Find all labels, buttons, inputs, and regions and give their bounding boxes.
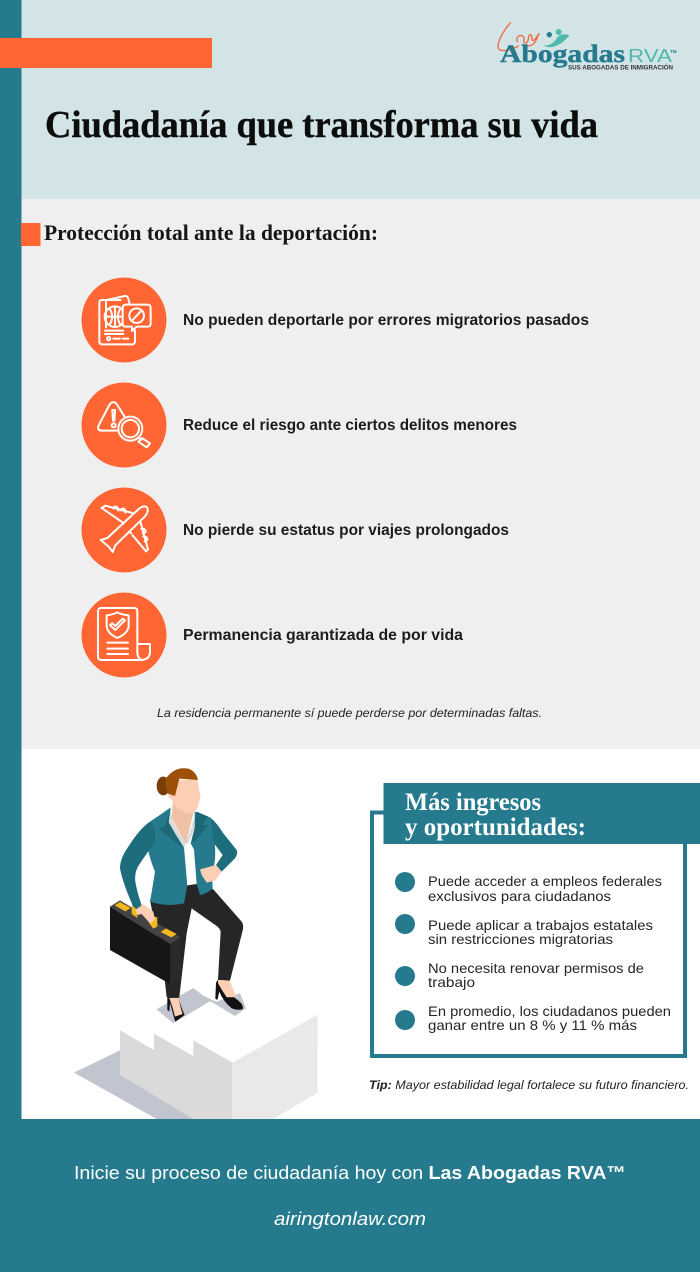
jacket lapels [158, 808, 208, 848]
left vertical bar [0, 0, 22, 1119]
list item 2: Puede aplicar a trabajos estatales [428, 917, 653, 933]
collar [169, 810, 195, 847]
briefcase [110, 900, 181, 984]
list item 1: exclusivos para ciudadanos [428, 888, 611, 904]
block left face [120, 1030, 232, 1119]
list item 2 [395, 914, 653, 947]
logo: RVA: RVA [628, 46, 672, 66]
left hand [135, 904, 155, 923]
title: Ciudadanía que transforma su vida [45, 104, 598, 146]
item: past migration errors [82, 278, 589, 362]
jacket [147, 807, 215, 905]
foot shadow [157, 988, 246, 1023]
logo [498, 23, 677, 72]
item: permanence [82, 592, 463, 678]
tip: Tip: Mayor estabilidad legal fortalece su futuro financiero. [369, 1078, 689, 1092]
list item 4: En promedio, los ciudadanos pueden [428, 1003, 671, 1019]
panel header band [384, 783, 700, 844]
list item 3 [395, 960, 644, 990]
neck [172, 793, 193, 844]
list item 3: No necesita renovar permisos de [428, 960, 644, 976]
panel heading [405, 789, 586, 841]
shoes [167, 980, 243, 1022]
footer website: airingtonlaw.com [274, 1208, 426, 1229]
right hand [200, 865, 222, 883]
shirt [171, 810, 196, 885]
item: minor offences [82, 382, 517, 468]
list item 3: trabajo [428, 974, 475, 990]
panel heading: y oportunidades: [405, 814, 586, 841]
item text: Permanencia garantizada de por vida [183, 627, 463, 644]
figure [110, 768, 243, 1022]
logo: script Las [498, 23, 569, 51]
footer call to action: Inicie su proceso de ciudadanía hoy con Las Abogadas RVA™ [74, 1162, 626, 1183]
panel frame [372, 812, 685, 1056]
logo: tagline: SUS ABOGADAS DE INMIGRACIÓN [568, 64, 673, 72]
icon: airplane [82, 488, 166, 572]
hair bun [157, 777, 170, 795]
list item 4: ganar entre un 8 % y 11 % más [428, 1017, 637, 1033]
right arm [210, 817, 237, 872]
icon: passport and prohibited sign [82, 278, 166, 362]
footer band [0, 1119, 700, 1272]
ankle skin [169, 980, 237, 1017]
block right face [232, 1015, 318, 1119]
panel heading: Más ingresos [405, 789, 541, 816]
orange accent bar [0, 38, 212, 68]
logo: trademark: TM [670, 49, 677, 54]
item text: No pueden deportarle por errores migratorios pasados [183, 312, 589, 329]
item: prolonged travel [82, 488, 509, 572]
panel: deportation protection [21, 199, 700, 749]
list item 4 [395, 1003, 671, 1033]
section marker [21, 223, 40, 246]
left arm [120, 822, 155, 912]
hair [166, 768, 198, 796]
header panel [21, 0, 700, 199]
icon: document with shield [82, 592, 166, 678]
icon: warning and magnifier [82, 382, 166, 468]
note: La residencia permanente sí puede perderse por determinadas faltas. [157, 706, 542, 720]
illustration: businesswoman stepping on a block [74, 768, 318, 1119]
logo: Abogadas wordmark: Abogadas [500, 41, 625, 68]
panel: more income and opportunities [372, 783, 700, 1056]
trousers [150, 884, 243, 997]
item text: Reduce el riesgo ante ciertos delitos menores [183, 417, 517, 434]
list item 2: sin restricciones migratorias [428, 931, 613, 947]
item text: No pierde su estatus por viajes prolongados [183, 522, 509, 539]
section heading: Protección total ante la deportación: [44, 220, 378, 245]
list item 1 [395, 872, 662, 904]
head [167, 779, 201, 813]
list item 1: Puede acceder a empleos federales [428, 873, 662, 889]
block shadow [74, 1050, 193, 1119]
